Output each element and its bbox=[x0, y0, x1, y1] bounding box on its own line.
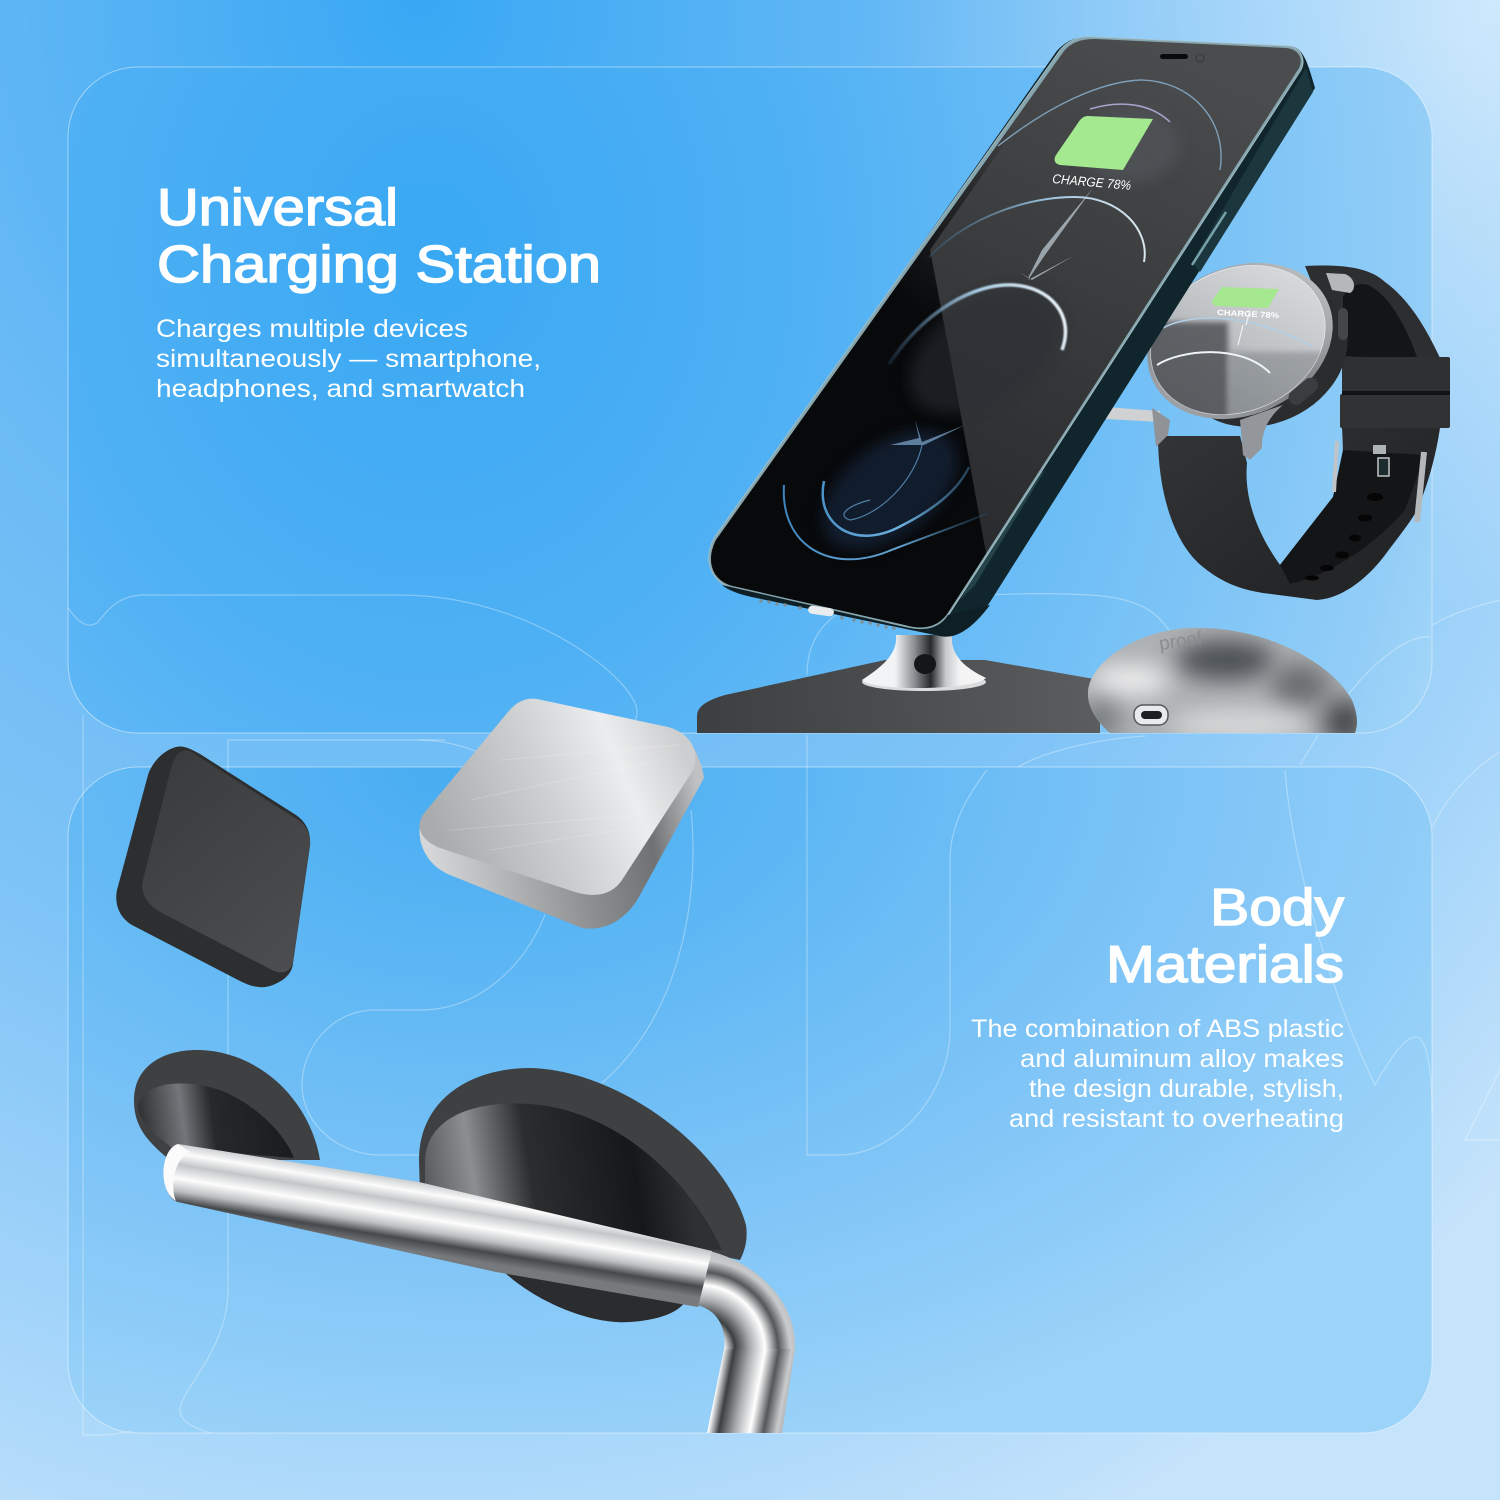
text: charging description bbox=[156, 315, 541, 403]
chrome rod bbox=[163, 1144, 795, 1433]
watch screen: CHARGE 78% bbox=[1217, 308, 1279, 320]
phone screen bbox=[711, 39, 1301, 627]
phone wallpaper bbox=[690, 50, 1221, 630]
text: charging description: Charges multiple devices bbox=[156, 315, 468, 343]
product: body material parts bbox=[116, 699, 795, 1433]
text: materials description: and aluminum alloy makes bbox=[1020, 1045, 1344, 1073]
heading: body materials: Materials bbox=[1106, 936, 1344, 994]
phone notch bbox=[1160, 54, 1204, 62]
phone battery icon bbox=[1055, 116, 1153, 170]
text: materials description: The combination of ABS plastic bbox=[971, 1015, 1344, 1043]
panel: charging station bbox=[68, 67, 1432, 733]
usb-c port bbox=[1134, 705, 1168, 725]
watch bbox=[1147, 262, 1450, 600]
battery label: CHARGE 78% bbox=[1052, 171, 1132, 193]
phone rim bbox=[709, 37, 1303, 630]
large magnetic pad bbox=[419, 1068, 747, 1322]
heading: body materials: Body bbox=[1210, 879, 1344, 937]
watch screen bbox=[1150, 287, 1321, 414]
charging base bbox=[697, 660, 1100, 733]
brushed aluminum sample bbox=[420, 699, 704, 929]
text: charging description: headphones, and smartwatch bbox=[156, 375, 525, 403]
case logo: proof bbox=[1158, 628, 1204, 655]
phone bbox=[690, 37, 1315, 637]
stand neck bbox=[862, 635, 986, 691]
heading: universal charging station: Universal bbox=[157, 179, 398, 237]
watch case bbox=[1147, 262, 1354, 460]
stand rod behind watch bbox=[1106, 407, 1160, 422]
panel: body materials bbox=[68, 767, 1432, 1433]
matte black plastic sample bbox=[116, 747, 310, 987]
text: materials description: the design durable, stylish, bbox=[1029, 1075, 1344, 1103]
phone bottom edge with ports bbox=[722, 585, 990, 637]
text: charging description: simultaneously — smartphone, bbox=[156, 345, 541, 373]
heading: body materials bbox=[1106, 879, 1344, 994]
small magnetic pad bbox=[134, 1050, 320, 1160]
watch battery icon bbox=[1212, 287, 1279, 308]
text: materials description bbox=[971, 1015, 1344, 1133]
phone body bbox=[712, 37, 1315, 637]
watch strap bbox=[1158, 266, 1450, 600]
text: materials description: and resistant to overheating bbox=[1009, 1105, 1344, 1133]
product: charging stand with devices bbox=[690, 37, 1450, 746]
heading: universal charging station: Charging Station bbox=[157, 236, 601, 294]
earbuds case bbox=[1088, 628, 1357, 733]
heading: universal charging station bbox=[157, 179, 601, 294]
